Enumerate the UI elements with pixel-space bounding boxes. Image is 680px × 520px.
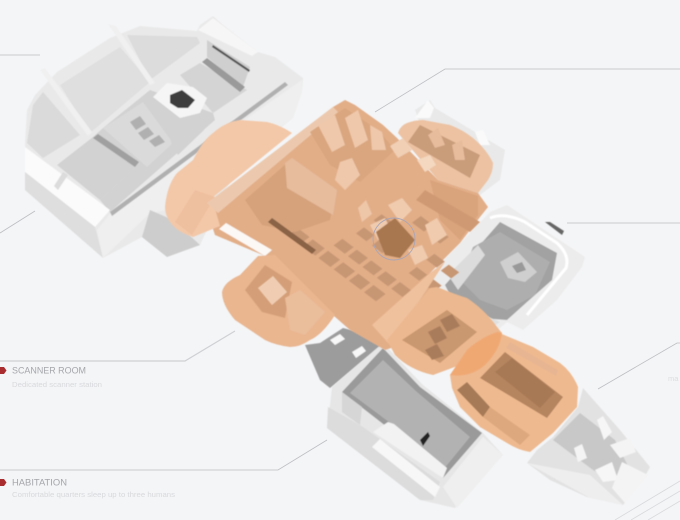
label: scanner room: Dedicated scanner station	[12, 380, 102, 389]
label: scanner room: SCANNER ROOM	[12, 366, 86, 376]
top-left white module	[25, 16, 303, 258]
hull rim and wall	[207, 107, 338, 213]
label: habitation: HABITATION	[12, 478, 67, 488]
right gray room	[430, 205, 585, 345]
lower white habitation module	[305, 328, 503, 508]
orange highlight: aft compartment	[450, 332, 578, 452]
orange highlight: upper right pod	[398, 120, 493, 193]
upper right pod backing	[415, 100, 505, 195]
upper equipment racks	[310, 108, 395, 182]
orange highlight: main deck	[165, 100, 578, 452]
hull floor panel grid	[273, 164, 478, 318]
scanner ring	[373, 218, 415, 260]
orange highlight: left lobe	[165, 120, 292, 237]
label: scanner room	[0, 366, 102, 389]
orange highlight: scanner room	[222, 255, 335, 347]
orange highlight: central compartment	[387, 287, 502, 375]
label: habitation: Comfortable quarters sleep up to three humans	[12, 490, 175, 499]
label: partial right text: ma	[668, 374, 679, 383]
label: habitation	[0, 478, 175, 499]
white rail under main deck	[219, 223, 272, 256]
central column and blocks	[335, 158, 360, 190]
nose section	[527, 388, 650, 505]
